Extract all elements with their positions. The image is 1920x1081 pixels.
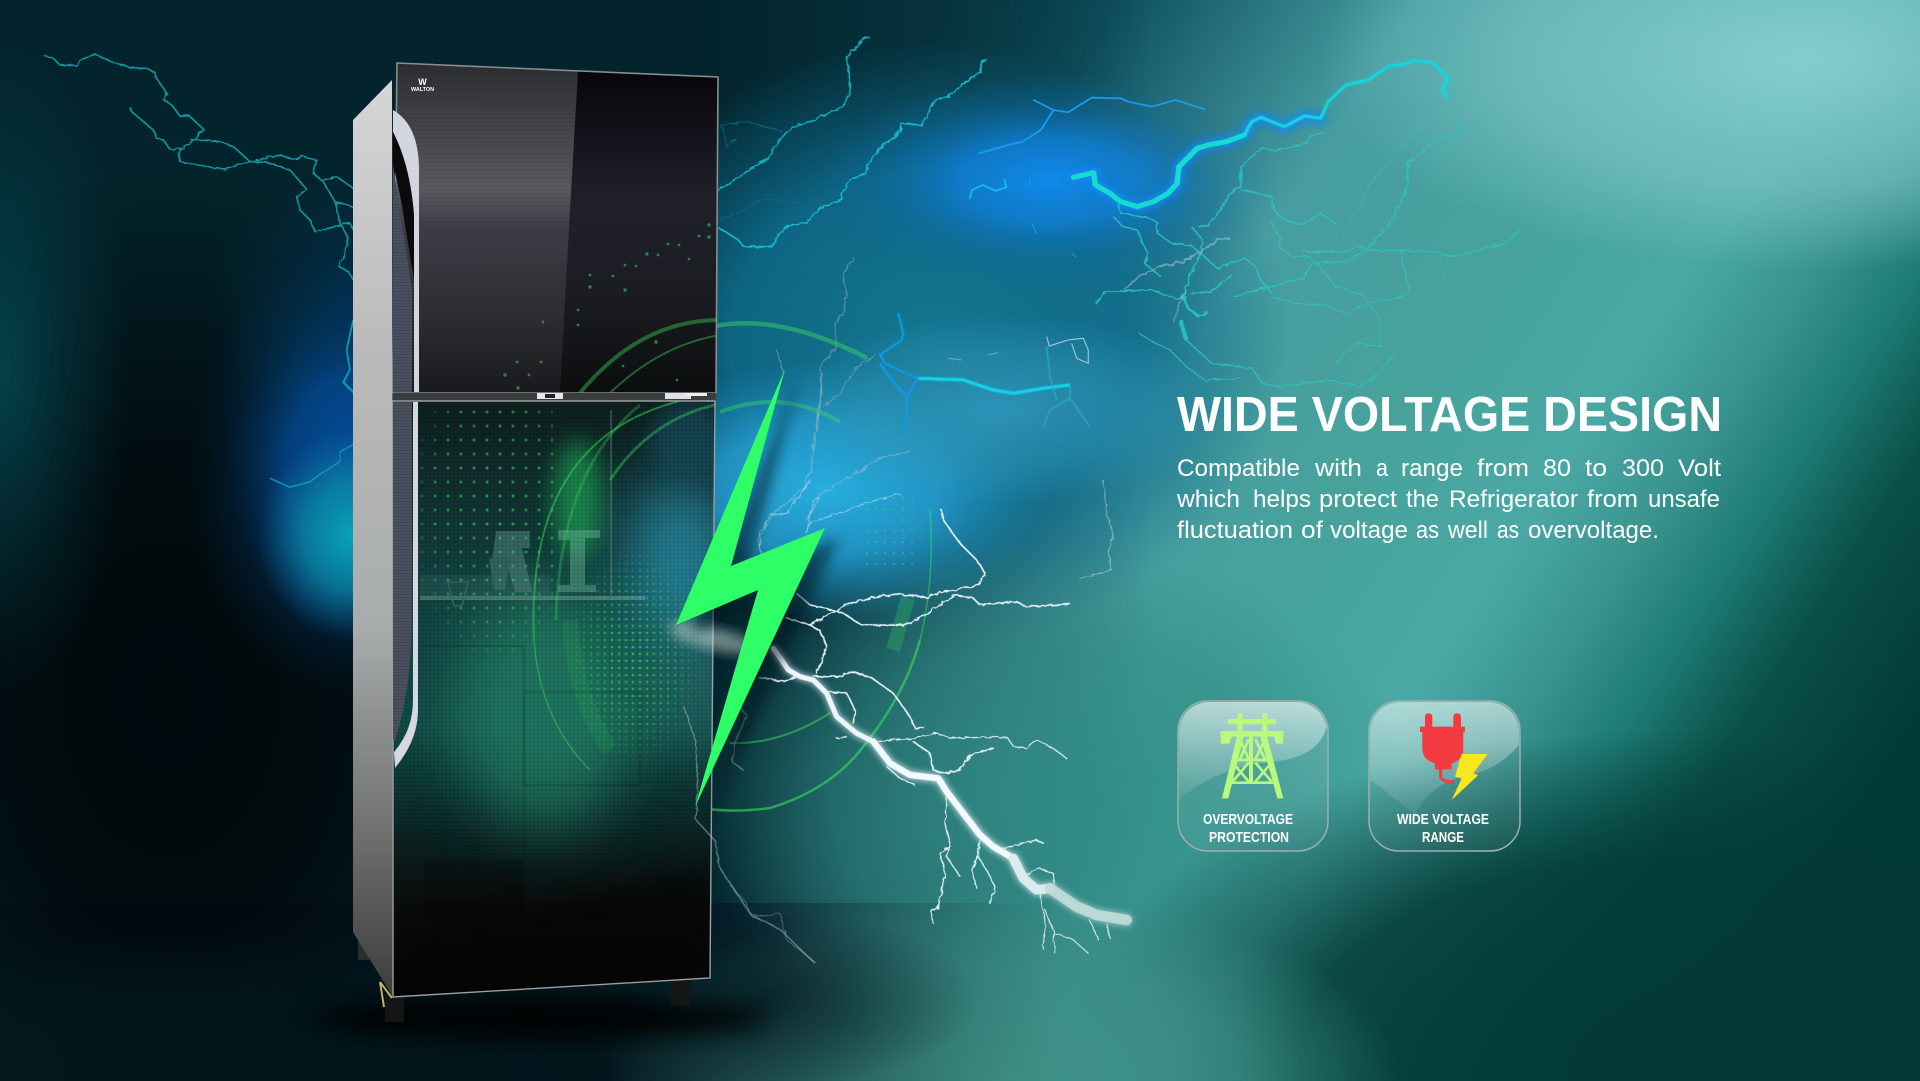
refrigerator: [310, 63, 770, 1038]
lightning: left of fridge, lower branch: [270, 320, 353, 487]
body text: the: [1406, 486, 1439, 513]
floor: [0, 903, 1920, 1081]
label: PROTECTION: [1209, 830, 1289, 846]
body text: from: [1587, 486, 1638, 513]
brand logo: WALTON: [411, 87, 434, 93]
thick glowing trunk: [773, 648, 1127, 920]
label: [1397, 812, 1489, 846]
body text: of: [1301, 517, 1323, 544]
light beam behind bolt: [667, 617, 757, 659]
label: [1203, 812, 1293, 846]
body text: Volt: [1678, 455, 1721, 482]
title: WIDE VOLTAGE DESIGN: [1177, 388, 1722, 442]
fridge side panel: [353, 80, 393, 997]
floor shadow: [310, 998, 770, 1038]
kitchen reflection: [420, 410, 645, 832]
dot cluster right of bolt: [860, 490, 914, 570]
door handle strip lower: [393, 402, 418, 768]
thin white branches: [730, 480, 1113, 963]
body text: unsafe: [1648, 486, 1720, 513]
body text: from: [1477, 455, 1529, 482]
body text: 80: [1543, 455, 1571, 482]
body text: a: [1376, 455, 1388, 482]
label: WIDE VOLTAGE: [1397, 812, 1489, 828]
body text: which: [1176, 486, 1240, 513]
door rings inside: [534, 401, 715, 770]
body text: Refrigerator: [1449, 486, 1578, 513]
top door trim: [393, 63, 718, 393]
icon: red plug with bolt: [1420, 713, 1488, 800]
body text: with: [1314, 455, 1362, 482]
door handle strip top: [393, 110, 419, 392]
body text: voltage: [1330, 517, 1408, 544]
panel: overvoltage protection card: [1178, 701, 1328, 851]
brass hinge: [380, 982, 392, 1007]
top door: [393, 63, 720, 393]
lightning: bright top-right main bolt: [970, 60, 1448, 257]
body text: to: [1585, 455, 1607, 482]
fridge feet: [358, 930, 690, 1022]
brand logo: [411, 77, 434, 93]
lightning: mid band to the right of the fridge: [880, 313, 1090, 430]
lower door trim: [393, 401, 715, 997]
body text: as: [1497, 517, 1519, 544]
label: OVERVOLTAGE: [1203, 812, 1293, 828]
lightning: top middle branches: [718, 37, 987, 430]
body text: protect: [1319, 486, 1397, 513]
body text: fluctuation: [1177, 517, 1293, 544]
lightning: faint bolts seen through door: [684, 373, 909, 963]
lightning: small pale scribble: [948, 337, 1088, 363]
body text: 300: [1622, 455, 1664, 482]
body text: overvoltage.: [1528, 517, 1659, 544]
body text: [1176, 455, 1721, 544]
lightning: top-right web of teal branches: [1095, 33, 1520, 387]
label: RANGE: [1422, 830, 1464, 846]
body text: Compatible: [1177, 455, 1300, 482]
brand logo: W: [418, 77, 427, 87]
icon: green lightning bolt: [676, 369, 839, 817]
body text: range: [1401, 455, 1463, 482]
lightning: main white bolt lower right: [730, 480, 1127, 963]
scattered dots top door: [503, 223, 711, 390]
door right translucency: [630, 475, 730, 655]
top-door green arc: [580, 320, 720, 393]
body text: as: [1416, 517, 1439, 544]
panel: wide voltage range card: [1369, 701, 1520, 851]
icon: transmission tower: [1221, 713, 1283, 798]
lightning: upper left branch: [45, 54, 353, 280]
body text: well: [1447, 517, 1488, 544]
green door glow: [455, 590, 635, 830]
green radar rings: [678, 323, 931, 811]
divider gap and hinges: [393, 393, 716, 401]
green dot fields: [420, 410, 554, 652]
body text: helps: [1253, 486, 1311, 513]
lower door: [393, 400, 735, 997]
